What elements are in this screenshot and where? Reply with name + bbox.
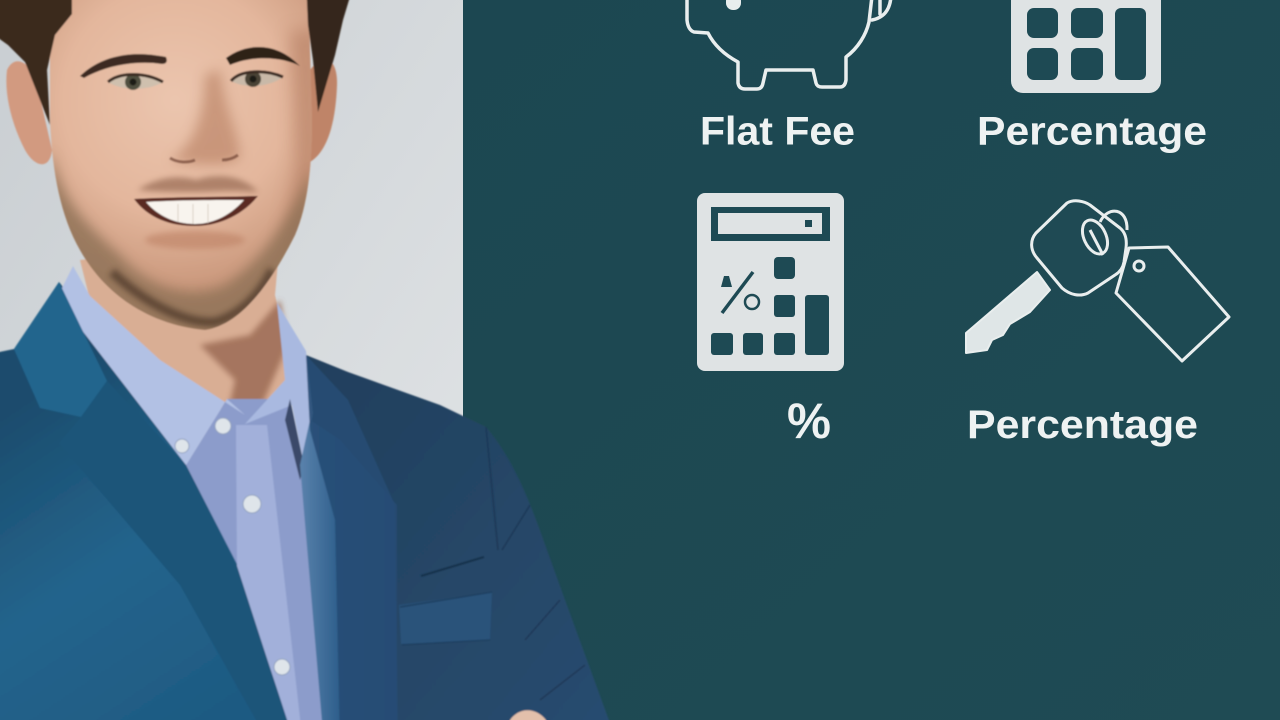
hand at bottom <box>510 710 546 720</box>
hair right <box>306 0 355 112</box>
hair left <box>0 0 72 125</box>
breast pocket <box>399 557 492 645</box>
chin shadow <box>145 231 245 249</box>
eyebrow left <box>80 54 167 78</box>
shirt placket <box>236 425 303 720</box>
icon: piggy bank <box>687 0 891 89</box>
shirt body <box>186 399 324 720</box>
icon: car key with tag <box>966 201 1229 361</box>
icon: calendar grid <box>1011 0 1161 93</box>
panel: teal background <box>463 0 1280 720</box>
neck <box>80 240 290 412</box>
left lapel lower <box>59 381 295 720</box>
neck shadow <box>200 300 288 412</box>
label: Flat Fee: Flat Fee <box>700 110 855 154</box>
shirt collar right <box>245 303 313 465</box>
left lapel upper <box>14 282 107 417</box>
icon: calculator <box>697 193 844 371</box>
panel: grey photo background <box>0 0 463 720</box>
photo: smiling man in blue blazer <box>0 0 618 720</box>
jacket left side <box>0 282 298 720</box>
mouth <box>134 196 258 226</box>
shirt collar left <box>57 266 245 465</box>
jacket right side <box>300 355 618 720</box>
buttons <box>175 418 290 675</box>
right lapel <box>306 355 398 720</box>
moustache shading <box>138 176 258 192</box>
nostrils <box>170 155 238 162</box>
eye left <box>108 74 163 90</box>
nose shading <box>170 70 240 165</box>
label: percent sign: % <box>787 393 831 449</box>
face <box>50 0 312 330</box>
sleeve seams <box>486 427 585 700</box>
inner jacket lapel strip <box>300 420 397 720</box>
label: Percentage bottom: Percentage <box>967 403 1198 447</box>
stubble <box>54 156 308 330</box>
eye right <box>231 71 283 87</box>
label: Percentage top: Percentage <box>977 110 1207 154</box>
ear left <box>6 61 52 164</box>
cheek and temple shading <box>284 26 312 216</box>
face shading and features <box>40 30 320 340</box>
shirt shadow under collar <box>285 399 304 480</box>
eyebrow right <box>226 47 300 66</box>
ear right <box>310 59 337 162</box>
